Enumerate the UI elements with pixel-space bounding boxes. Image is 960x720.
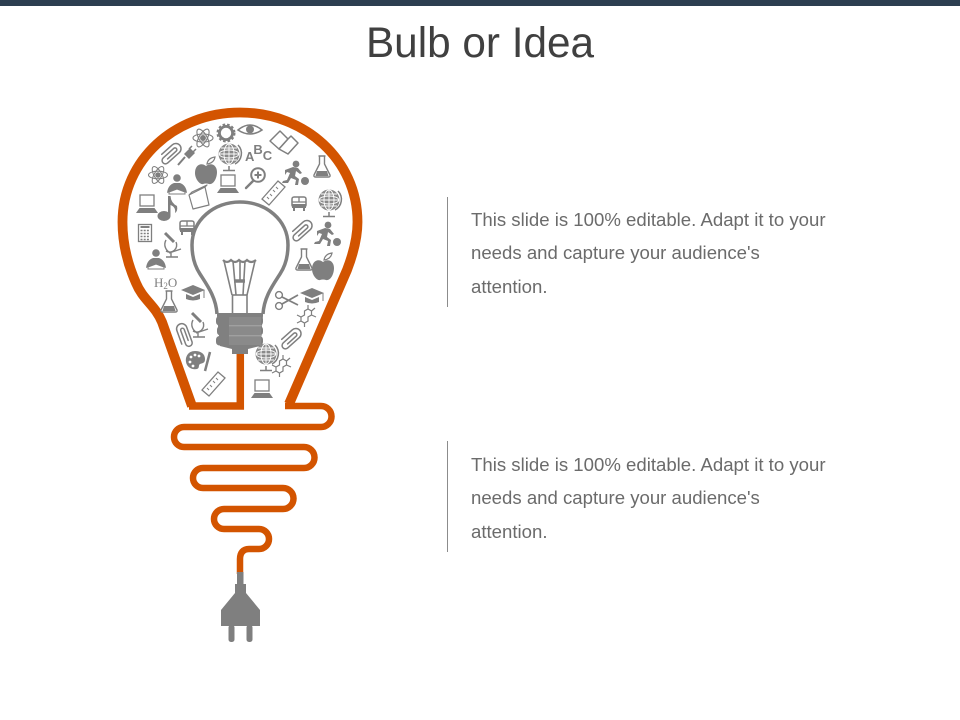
icon: ruler xyxy=(202,372,225,396)
icon: paperclip xyxy=(175,322,193,349)
icon: brush xyxy=(205,352,210,371)
bulb bottom and stem xyxy=(189,352,240,406)
icon: ABC letters: B xyxy=(253,142,263,157)
icon: atom xyxy=(148,165,168,185)
icon: molecule xyxy=(272,355,291,377)
icon: paperclip xyxy=(158,141,183,165)
icon: open book xyxy=(270,131,298,154)
icon: ABC letters: C xyxy=(263,148,273,163)
icon: person reading xyxy=(146,249,166,269)
icon: eye xyxy=(238,125,262,134)
icon: paperclip xyxy=(289,218,314,242)
icon: gear xyxy=(217,124,235,142)
bulb outline xyxy=(122,112,358,406)
icon: bus xyxy=(180,221,194,235)
text block: first note: This slide is 100% editable. Adapt it to your xyxy=(471,209,826,230)
icon: music note xyxy=(158,196,177,221)
icon: H2O formula: O xyxy=(168,275,177,290)
text block: first note: attention. xyxy=(471,276,548,297)
icons scattered inside bulb xyxy=(136,124,341,398)
icon: globe xyxy=(318,190,341,216)
text block: first note: needs and capture your audience's xyxy=(471,242,760,263)
icon: scissors xyxy=(276,292,298,309)
text block: second note: attention. xyxy=(471,521,548,542)
icon: laptop xyxy=(136,195,158,213)
icon: plug xyxy=(178,146,196,165)
inner bulb glass xyxy=(192,202,288,314)
icon: runner xyxy=(282,161,309,185)
screw base xyxy=(216,313,263,354)
icon: graduation cap xyxy=(300,288,324,304)
icon: ruler xyxy=(262,181,285,205)
icon: palette xyxy=(186,351,205,369)
icon: laptop xyxy=(217,175,239,193)
text block: first note xyxy=(447,197,848,307)
icon: person reading xyxy=(167,174,187,194)
icon: globe xyxy=(256,344,278,370)
icon: laptop xyxy=(251,380,273,398)
icon: graduation cap xyxy=(181,285,205,300)
text block: second note: needs and capture your audience's xyxy=(471,487,760,508)
icon: magnifier xyxy=(246,168,265,188)
icon: ABC letters: A xyxy=(245,149,254,164)
icon: cube xyxy=(189,185,209,209)
icon: calculator xyxy=(138,224,152,242)
icon: microscope xyxy=(165,233,181,257)
icon: flask xyxy=(161,291,177,312)
icon: apple xyxy=(312,253,334,280)
text block: second note xyxy=(447,441,848,552)
coiled cord xyxy=(174,406,332,574)
filament xyxy=(223,260,256,314)
title: Bulb or Idea xyxy=(366,19,594,66)
icon: apple xyxy=(195,157,217,184)
icon: microscope xyxy=(192,313,208,337)
text block: second note: This slide is 100% editable. Adapt it to your xyxy=(471,454,826,475)
top bar xyxy=(0,0,960,6)
inner light bulb xyxy=(192,202,288,354)
bulb head and neck xyxy=(122,112,358,406)
icon: H2O formula: 2 xyxy=(163,281,168,291)
plug xyxy=(221,572,260,642)
icon: H2O formula: H xyxy=(154,275,163,290)
icon: molecule xyxy=(297,305,316,327)
icon: runner xyxy=(314,222,341,246)
icon: bus xyxy=(292,197,306,211)
icon: flask xyxy=(296,249,312,270)
icon: paperclip xyxy=(278,326,303,350)
icon: flask xyxy=(314,156,330,177)
icon: globe xyxy=(218,144,241,170)
icon: atom xyxy=(193,127,213,149)
